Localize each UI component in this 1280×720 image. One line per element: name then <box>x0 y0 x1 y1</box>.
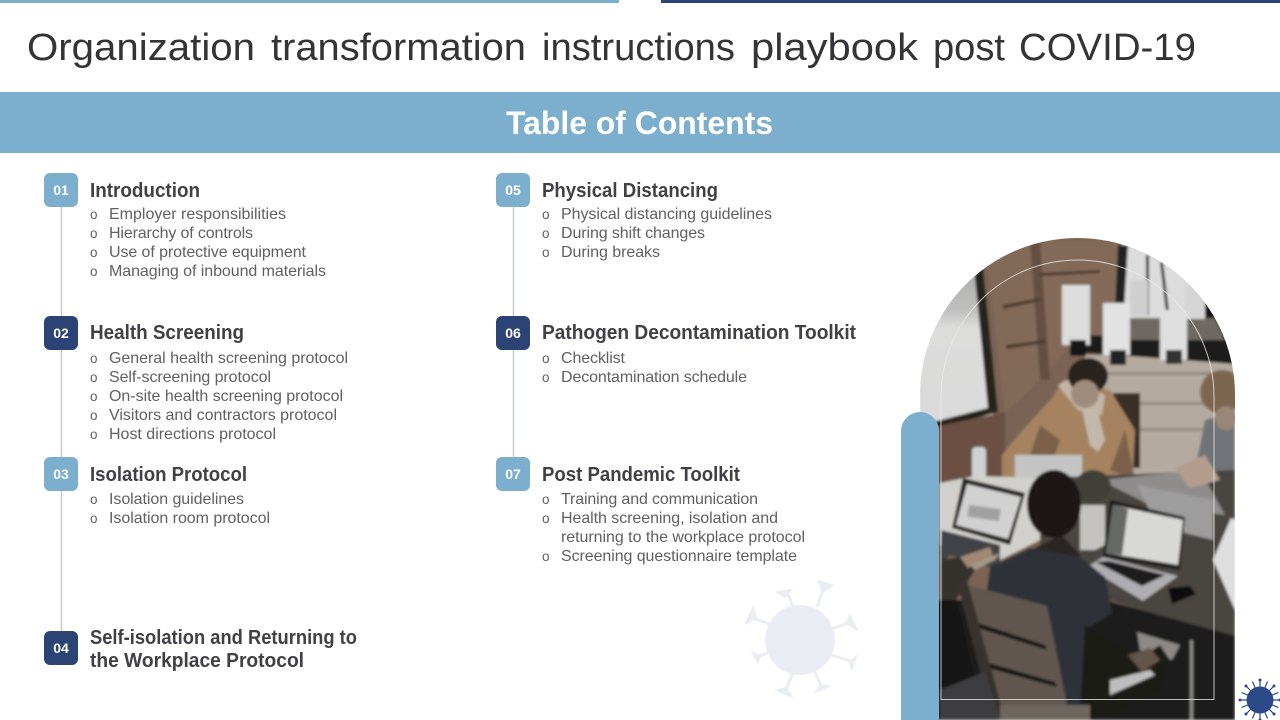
bullet list: introduction <box>90 206 326 280</box>
section 03: isolation protocol <box>44 457 270 527</box>
bullet list: health screening: Self-screening protocol <box>109 369 271 386</box>
laptop right <box>1087 557 1178 601</box>
section 05: physical distancing <box>496 173 772 261</box>
bullet list: health screening: General health screening protocol <box>109 350 348 367</box>
bullet list: pathogen decontamination toolkit <box>542 350 747 386</box>
bullet list: health screening: o <box>90 370 98 385</box>
timeline connector: left column <box>60 190 62 640</box>
heading: introduction: Introduction <box>90 180 200 202</box>
icon: pale virus watermark <box>744 580 858 698</box>
badge 02 <box>44 316 78 350</box>
bullet list: pathogen decontamination toolkit: o <box>542 351 550 366</box>
bullet list: introduction: Employer responsibilities <box>109 206 286 223</box>
bullet list: health screening: On-site health screening protocol <box>109 388 343 405</box>
bullet list: post pandemic toolkit: o <box>542 511 550 526</box>
man at right <box>1199 369 1235 414</box>
bullet list: post pandemic toolkit: Training and communication <box>561 491 758 508</box>
badge 03 <box>44 457 78 491</box>
badge 05 <box>496 173 530 207</box>
bullet list: pathogen decontamination toolkit: Decontamination schedule <box>561 369 747 386</box>
bullet list: introduction: Managing of inbound materials <box>109 263 326 280</box>
bright window right <box>1120 244 1208 320</box>
heading: isolation protocol: Isolation Protocol <box>90 464 247 486</box>
bullet list: physical distancing: o <box>542 245 550 260</box>
title: post <box>933 27 1005 69</box>
badge 06: 06 <box>505 325 521 341</box>
bullet list: pathogen decontamination toolkit: o <box>542 370 550 385</box>
background laptop facing man <box>1015 455 1082 485</box>
blue pill accent <box>901 412 939 720</box>
timeline connector: right column <box>512 190 514 475</box>
bullet list: physical distancing: o <box>542 207 550 222</box>
section 06: pathogen decontamination toolkit <box>496 316 856 386</box>
bullet list: post pandemic toolkit <box>542 491 805 565</box>
bullet list: pathogen decontamination toolkit: Checklist <box>561 350 626 367</box>
section 01: introduction <box>44 173 326 280</box>
bullet list: post pandemic toolkit: returning to the workplace protocol <box>561 529 805 546</box>
bullet list: health screening: o <box>90 389 98 404</box>
bullet list: introduction: o <box>90 245 98 260</box>
window left <box>920 274 994 424</box>
bullet list: introduction: Hierarchy of controls <box>109 225 253 242</box>
bullet list: post pandemic toolkit: o <box>542 492 550 507</box>
bullet list: introduction: Use of protective equipment <box>109 244 307 261</box>
under table dark <box>920 600 1235 720</box>
bullet list: isolation protocol: o <box>90 492 98 507</box>
bullet list: post pandemic toolkit: Screening questionnaire template <box>561 548 797 565</box>
bullet list: post pandemic toolkit: Health screening, isolation and <box>561 510 778 527</box>
heading: pathogen decontamination toolkit: Pathogen Decontamination Toolkit <box>542 322 856 344</box>
badge 02: 02 <box>53 325 69 341</box>
heading: self-isolation and returning <box>90 627 357 672</box>
section 07: post pandemic toolkit <box>496 457 805 565</box>
bullet list: health screening: o <box>90 408 98 423</box>
bullet list: health screening: o <box>90 427 98 442</box>
bullet list: isolation protocol: o <box>90 511 98 526</box>
person arm at left <box>940 556 976 602</box>
icon: corner virus <box>1238 678 1280 720</box>
title <box>27 27 1196 69</box>
bullet list: isolation protocol <box>90 491 270 527</box>
bullet list: isolation protocol: Isolation guidelines <box>109 491 244 508</box>
heading: physical distancing: Physical Distancing <box>542 180 718 202</box>
man in hoodie <box>1002 380 1135 490</box>
bullet list: physical distancing: Physical distancing guidelines <box>561 206 772 223</box>
bullet list: health screening: Visitors and contractors protocol <box>109 407 337 424</box>
badge 07 <box>496 457 530 491</box>
badge 06 <box>496 316 530 350</box>
bullet list: health screening <box>90 350 348 443</box>
rear wall <box>1085 355 1235 485</box>
title: Organization <box>27 27 255 69</box>
badge 07: 07 <box>505 466 521 482</box>
section 04: self-isolation <box>44 627 357 672</box>
decorative arch frame line <box>941 260 1214 700</box>
bullet list: physical distancing <box>542 206 772 261</box>
banner: table of contents <box>0 92 1280 153</box>
title: instructions <box>542 27 735 69</box>
bullet list: health screening: Host directions protocol <box>109 426 276 443</box>
badge 04: 04 <box>53 640 69 656</box>
bullet list: post pandemic toolkit: o <box>542 549 550 564</box>
badge 04 <box>44 631 78 665</box>
banner: table of contents: Table of Contents <box>506 105 773 141</box>
title: playbook <box>751 27 919 69</box>
dark panel <box>1113 393 1140 468</box>
title: transformation <box>271 27 526 69</box>
bottle <box>972 447 986 483</box>
table left <box>940 476 1040 560</box>
badge 03: 03 <box>53 466 69 482</box>
bullet list: introduction: o <box>90 226 98 241</box>
bullet list: health screening: o <box>90 351 98 366</box>
heading: post pandemic toolkit: Post Pandemic Toolkit <box>542 464 740 486</box>
table right <box>1040 470 1235 640</box>
laptop left <box>941 530 1000 570</box>
bullet list: physical distancing: During shift changes <box>561 225 705 242</box>
plant and pot <box>1080 505 1105 550</box>
heading: self-isolation and returning: the Workplace Protocol <box>90 650 304 672</box>
top accent bar <box>0 0 1280 3</box>
bullet list: physical distancing: During breaks <box>561 244 660 261</box>
badge 01 <box>44 173 78 207</box>
bullet list: physical distancing: o <box>542 226 550 241</box>
chair <box>968 585 1068 706</box>
laptop far right <box>1213 518 1235 610</box>
section 02: health screening <box>44 316 348 443</box>
badge 01: 01 <box>53 182 69 198</box>
badge 05: 05 <box>505 182 521 198</box>
bullet list: isolation protocol: Isolation room protocol <box>109 510 270 527</box>
heading: self-isolation and returning: Self-isolation and Returning to <box>90 627 357 649</box>
bullet list: introduction: o <box>90 264 98 279</box>
man from behind <box>1027 470 1081 538</box>
grey laptop rear <box>1137 485 1213 540</box>
photo: team working on laptops <box>915 235 1244 720</box>
bullet list: introduction: o <box>90 207 98 222</box>
heading: health screening: Health Screening <box>90 322 244 344</box>
title: COVID-19 <box>1019 27 1196 69</box>
chandelier <box>1072 335 1235 364</box>
